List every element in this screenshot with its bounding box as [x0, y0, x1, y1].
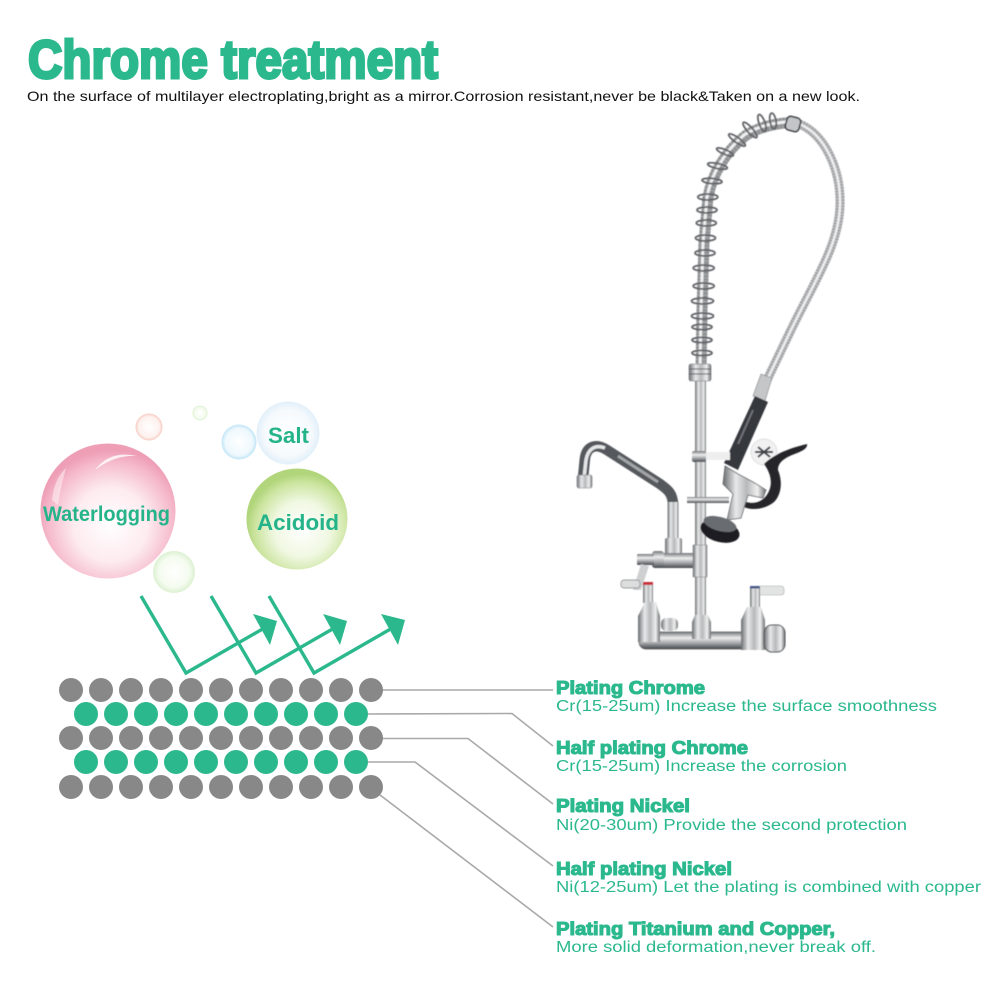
label: plating titanium and copper: More solid deformation,never break off. — [556, 939, 876, 956]
leader lines — [367, 690, 553, 927]
bubble: acidoid: Acidoid — [257, 510, 339, 535]
spray head — [698, 513, 742, 547]
bubble: waterlogging — [40, 444, 176, 578]
subtitle: On the surface of multilayer electroplating,bright as a mirror.Corrosion resistant,never be black&Taken on a new look. — [27, 89, 860, 104]
layer 1: grey atoms — [59, 678, 383, 702]
label: plating chrome — [556, 677, 937, 715]
label: plating titanium and copper: Plating Titanium and Copper, — [556, 918, 835, 939]
label: half plating chrome: Half plating Chrome — [556, 737, 748, 758]
right valve lever — [750, 586, 784, 609]
bubble: small blue — [222, 424, 256, 460]
illustration: chrome pre-rinse faucet — [577, 113, 840, 652]
title: Chrome treatment — [28, 30, 438, 90]
label: half plating nickel — [556, 858, 981, 896]
plating layer diagram — [59, 678, 383, 799]
bubble: acidoid — [246, 468, 348, 570]
wall mount body — [638, 602, 785, 652]
bubble: small pink — [136, 414, 162, 440]
label: plating nickel: Plating Nickel — [556, 795, 690, 816]
label: plating nickel: Ni(20-30um) Provide the second protection — [556, 817, 907, 834]
label: plating titanium and copper — [556, 918, 876, 956]
bubble: salt: Salt — [268, 423, 310, 448]
bubble: salt — [256, 402, 320, 464]
arrow 3 — [269, 596, 405, 673]
arrow 1 — [141, 596, 277, 673]
spring riser — [689, 113, 802, 381]
left valve lever — [621, 564, 653, 603]
bubbles — [40, 402, 348, 593]
spray handle — [724, 374, 772, 470]
label: half plating chrome — [556, 737, 847, 775]
bubble: tiny green — [192, 406, 208, 420]
label: half plating nickel: Ni(12-25um) Let the plating is combined with copper — [556, 879, 981, 896]
wall bracket — [692, 439, 777, 465]
layer 4: green atoms — [74, 750, 368, 774]
label: half plating chrome: Cr(15-25um) Increase the corrosion — [556, 758, 847, 775]
label: half plating nickel: Half plating Nickel — [556, 858, 732, 879]
riser pole — [695, 378, 706, 618]
label: plating chrome: Cr(15-25um) Increase the surface smoothness — [556, 698, 937, 715]
hose — [767, 123, 840, 380]
bubble: waterlogging: Waterlogging — [43, 503, 170, 526]
tee and sleeve — [637, 538, 707, 577]
label: plating nickel — [556, 795, 907, 834]
layer 2: green atoms — [74, 702, 368, 726]
arrow 2 — [211, 596, 347, 673]
layer 3: grey atoms — [59, 726, 383, 750]
swing spout — [577, 446, 678, 540]
label: plating chrome: Plating Chrome — [556, 677, 705, 698]
layer 5: grey atoms — [59, 775, 383, 799]
spray valve and lever — [687, 444, 807, 520]
reflection arrows — [141, 596, 405, 673]
bubble: medium green — [153, 551, 195, 593]
